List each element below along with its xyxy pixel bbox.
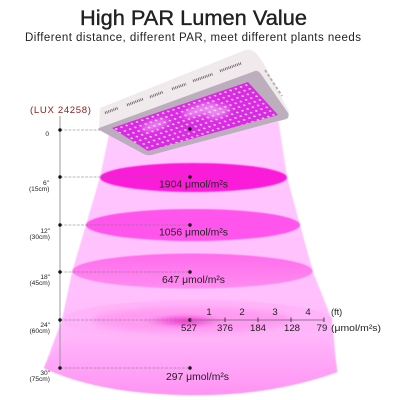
title: High PAR Lumen Value xyxy=(80,7,307,30)
horizontal distance scale: 527 xyxy=(181,323,197,334)
distance labels: 6" xyxy=(43,180,50,187)
distance labels: 0 xyxy=(45,131,49,138)
LED grow light xyxy=(98,50,289,155)
beam: 30 inch level xyxy=(44,325,337,395)
PAR values xyxy=(159,180,229,383)
distance labels: (75cm) xyxy=(29,376,50,383)
light pool: 6 inch level xyxy=(100,163,287,192)
distance labels: (30cm) xyxy=(29,234,50,241)
subtitle: Different distance, different PAR, meet different plants needs xyxy=(25,32,361,44)
lamp side label xyxy=(265,70,282,96)
lamp LED panel xyxy=(112,82,278,151)
lamp front frame xyxy=(98,71,289,155)
PAR values: 647 μmol/m²s xyxy=(162,275,225,286)
PAR values: 297 μmol/m²s xyxy=(166,372,229,383)
LED dots xyxy=(112,82,278,151)
horizontal distance scale: 2 xyxy=(239,307,245,318)
PAR values: 1056 μmol/m²s xyxy=(159,228,228,238)
light pool: 12 inch level xyxy=(86,209,300,241)
horizontal distance scale: 128 xyxy=(284,323,300,334)
lamp vent slots xyxy=(105,63,242,113)
distance labels: 18" xyxy=(40,274,51,281)
distance labels: (15cm) xyxy=(29,186,50,193)
horizontal distance scale: (μmol/m²s) xyxy=(331,323,381,334)
distance labels: (45cm) xyxy=(29,280,50,287)
horizontal distance scale: (ft) xyxy=(331,307,342,317)
horizontal distance scale: 184 xyxy=(250,323,267,334)
horizontal distance scale: 79 xyxy=(317,323,327,334)
light cone xyxy=(44,118,337,395)
LED glow xyxy=(140,100,231,133)
horizontal distance scale xyxy=(181,307,381,334)
light pool: 24 inch level xyxy=(62,300,332,340)
distance labels: (60cm) xyxy=(29,328,50,335)
distance labels: 30" xyxy=(40,370,51,377)
light pool: 18 inch level xyxy=(72,254,312,288)
LUX label: (LUX 24258) xyxy=(30,105,91,116)
horizontal distance scale: 1 xyxy=(206,307,212,318)
horizontal distance scale: 4 xyxy=(305,307,311,318)
distance axis xyxy=(58,116,192,370)
distance labels: 12" xyxy=(40,228,51,235)
horizontal distance scale: 376 xyxy=(217,323,233,334)
PAR values: 1904 μmol/m²s xyxy=(159,180,228,190)
lamp housing top xyxy=(99,50,289,155)
distance labels: 24" xyxy=(40,322,51,329)
distance labels xyxy=(29,131,51,383)
horizontal distance scale: 3 xyxy=(272,307,278,318)
